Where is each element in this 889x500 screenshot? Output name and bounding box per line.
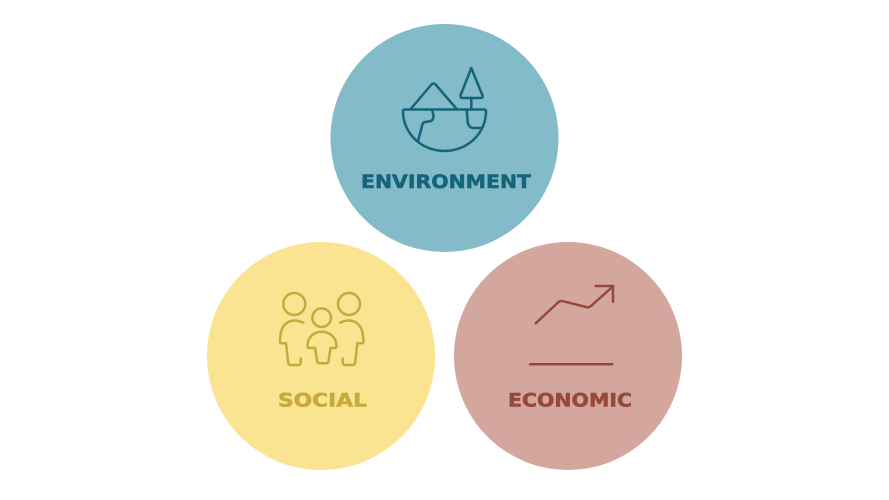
label: economic: ECONOMIC xyxy=(508,390,632,412)
panel: economic xyxy=(454,242,682,470)
label: social: SOCIAL xyxy=(278,390,367,412)
panel: social xyxy=(207,242,435,470)
icon: rising line chart xyxy=(530,286,613,364)
icon: family xyxy=(280,293,363,365)
social circle xyxy=(207,242,435,470)
label: environment: ENVIRONMENT xyxy=(361,171,531,193)
icon: globe with mountain and tree xyxy=(403,68,486,151)
economic circle xyxy=(454,242,682,470)
environment circle xyxy=(330,24,558,252)
panel: environment xyxy=(330,24,558,252)
